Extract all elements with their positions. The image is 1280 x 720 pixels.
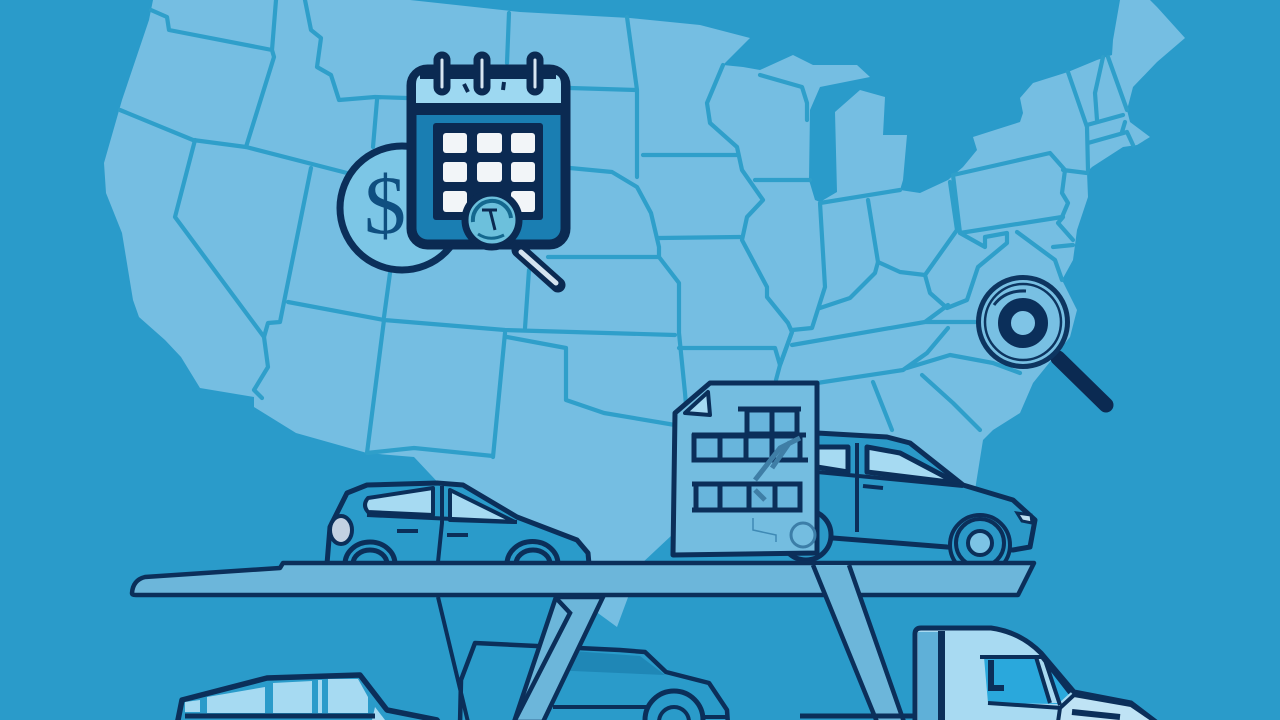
car windows [817,447,957,483]
car wheel [645,691,703,720]
table rows [694,410,800,510]
truck window [980,657,1070,708]
table top [132,563,1034,595]
document with table [673,383,817,555]
right leg [813,565,904,720]
car rear wheel [781,510,831,560]
icon: calendar [412,55,566,244]
calendar rings [437,55,540,92]
table legs [438,597,603,720]
icon: large magnifier [978,278,1106,405]
car windows [365,488,515,522]
map: United States [104,0,1185,627]
icon: dollar coin [340,146,464,270]
car: lower left [177,675,440,720]
state borders [120,0,1133,457]
car: on table, right [781,433,1035,575]
dollar sign: $ [364,159,406,252]
truck cab [800,628,1156,720]
car: lower middle [460,643,728,720]
car front wheel [950,515,1010,575]
car windows [185,679,385,720]
car: on table, left [327,483,589,564]
calendar cells [443,133,535,212]
car carrier table [132,563,1034,720]
car wheels [345,542,558,564]
icon: small magnifier with gauge [465,193,558,285]
